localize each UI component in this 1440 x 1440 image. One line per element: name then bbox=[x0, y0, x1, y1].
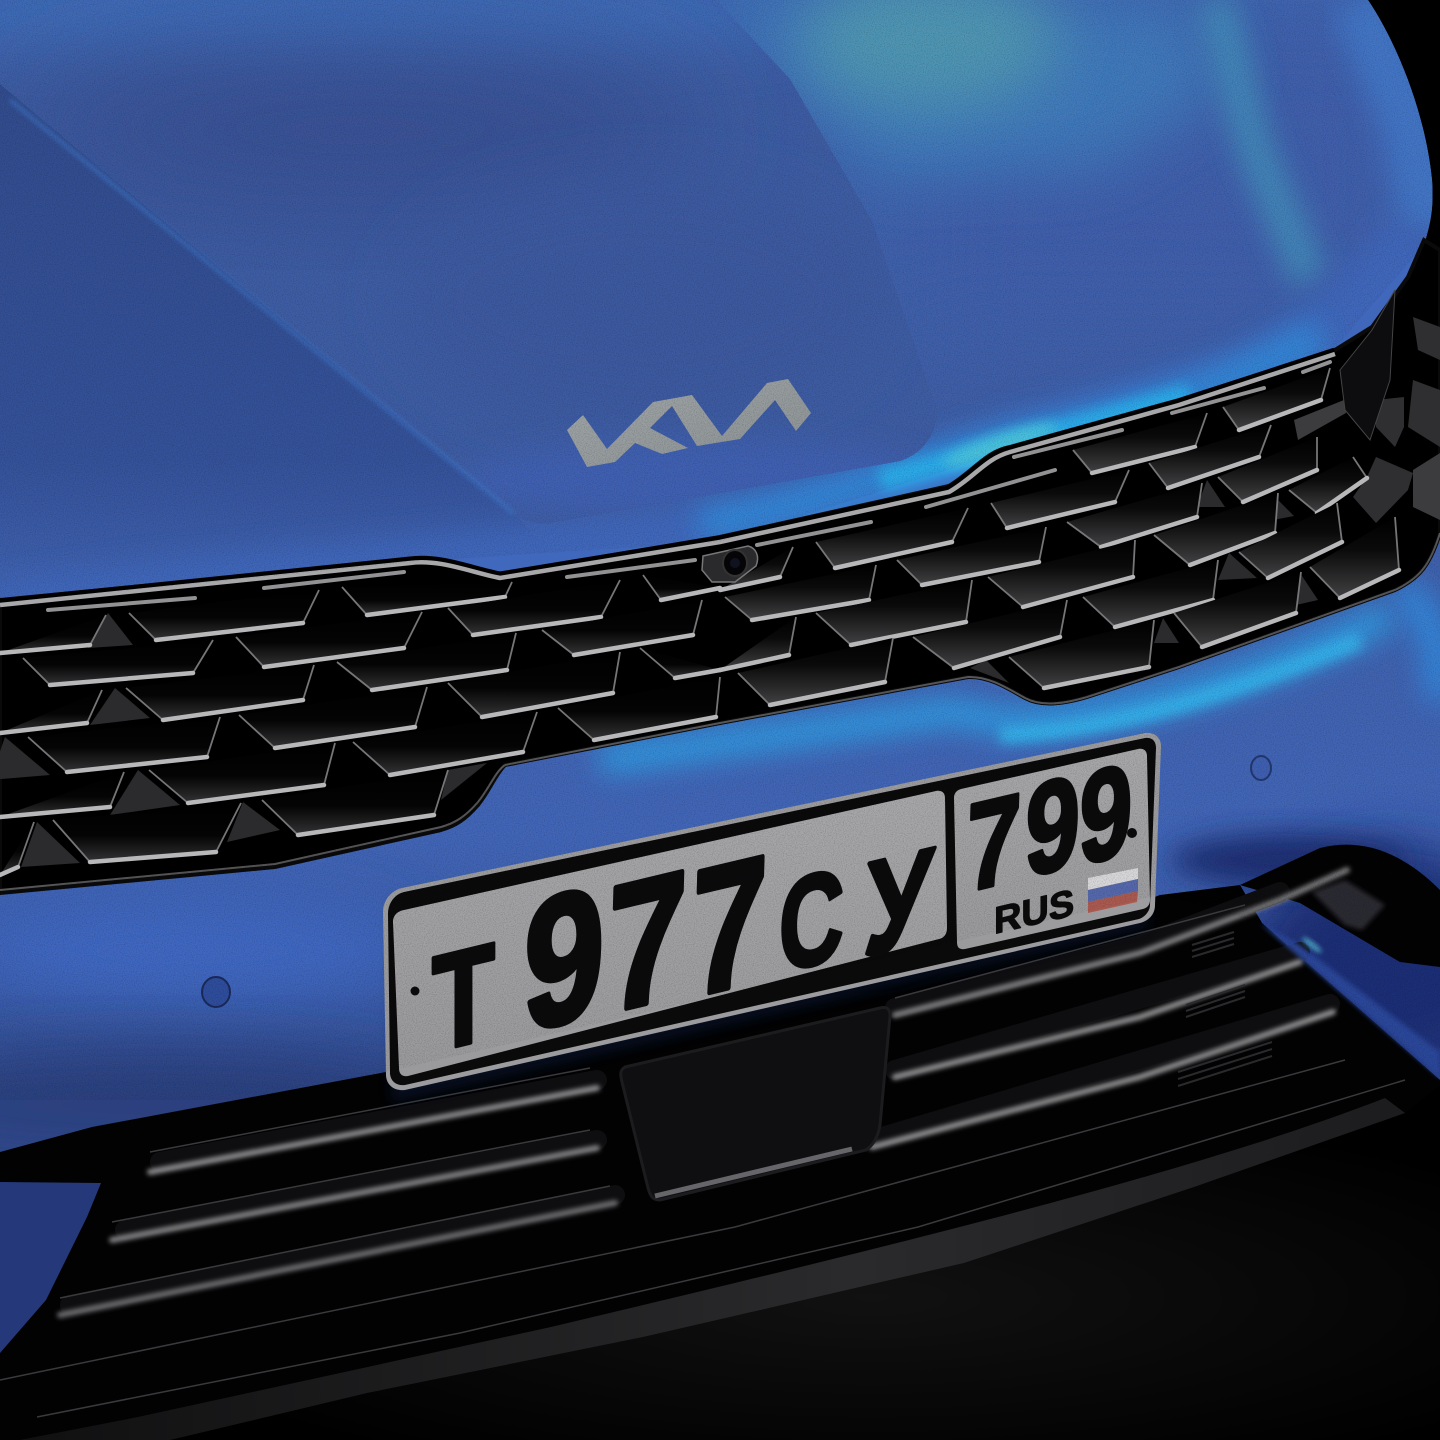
left lower bumper piece bbox=[0, 1182, 101, 1353]
blue streak beside intake bbox=[1260, 923, 1440, 1078]
region code: 7 bbox=[964, 767, 1023, 920]
plate number: У bbox=[860, 819, 938, 987]
plate frame bbox=[383, 733, 1161, 1090]
thin intake lines bbox=[0, 905, 1405, 1417]
mesh triangles bbox=[0, 480, 1318, 867]
Russian flag bbox=[1088, 868, 1138, 913]
lower intake bars bbox=[60, 870, 1347, 1315]
RUS mark: RUS bbox=[994, 881, 1074, 943]
right air intake pocket bbox=[1240, 845, 1440, 967]
slats left bbox=[0, 575, 720, 875]
glossy side plates bbox=[1294, 290, 1440, 523]
license plate bbox=[383, 733, 1161, 1102]
front camera bbox=[702, 546, 758, 582]
plate number: 7 bbox=[689, 817, 770, 1036]
KIA logo bbox=[567, 379, 811, 467]
plate number: 9 bbox=[521, 845, 607, 1072]
region code: 9 bbox=[1077, 736, 1134, 893]
grille housing bbox=[0, 240, 1440, 893]
floor under car bbox=[20, 1085, 1440, 1440]
chrome top trim bbox=[0, 352, 1335, 610]
tow hook cover bbox=[621, 1007, 890, 1200]
region panel bbox=[954, 749, 1150, 949]
plate number: Т bbox=[432, 914, 495, 1081]
plate number: С bbox=[777, 840, 846, 1001]
front grille bbox=[0, 240, 1440, 893]
plate number: 7 bbox=[605, 832, 689, 1051]
main number panel bbox=[393, 791, 947, 1076]
hood central panel bbox=[0, 0, 940, 523]
plate number bbox=[410, 817, 938, 1081]
paint grain overlay bbox=[0, 0, 1440, 1100]
lower lip bbox=[20, 1098, 1405, 1440]
region code: 9 bbox=[1023, 747, 1082, 905]
lower grille intake bbox=[0, 870, 1440, 1440]
parking sensor right bbox=[1251, 756, 1271, 780]
chrome bottom edge bbox=[0, 533, 1440, 890]
slats right bbox=[720, 368, 1399, 705]
parking sensor left bbox=[202, 977, 230, 1007]
region code bbox=[964, 736, 1137, 920]
hatch patches bbox=[1178, 932, 1272, 1086]
plate shadow bbox=[392, 747, 1147, 1102]
bar bodies bbox=[70, 892, 1330, 1305]
